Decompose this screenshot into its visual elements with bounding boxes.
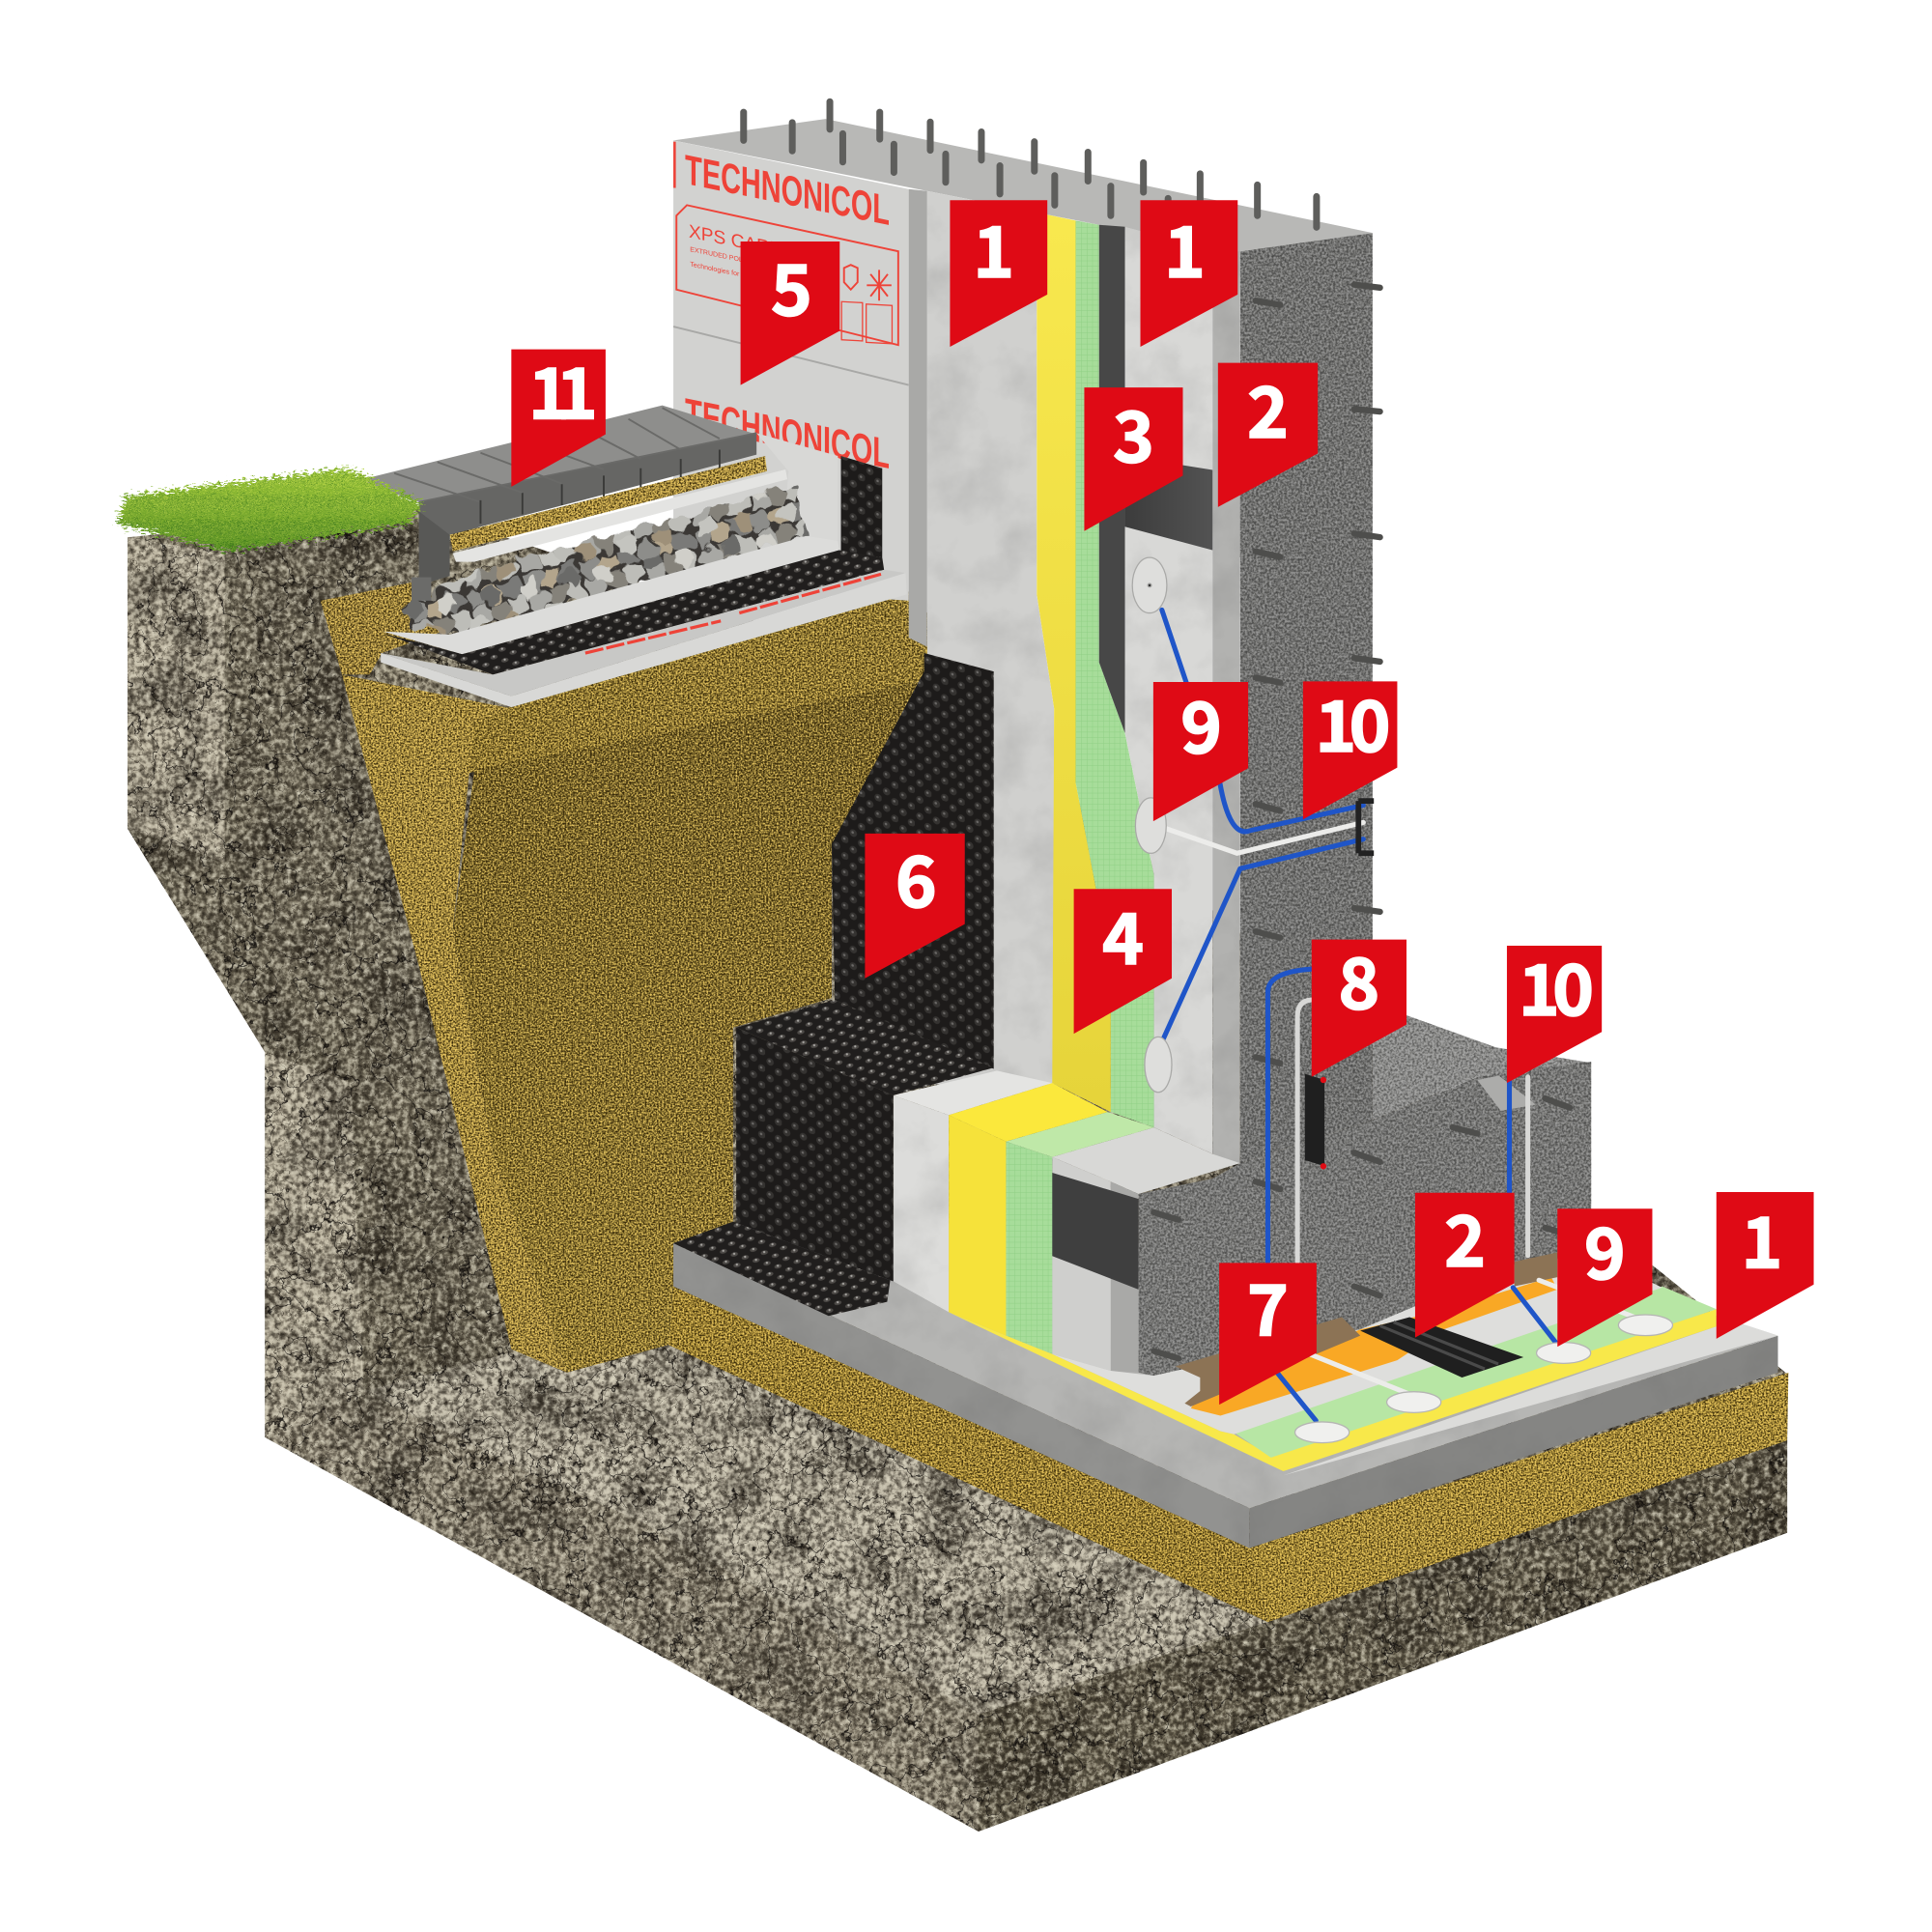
marker 9 floor [1557, 1198, 1652, 1347]
marker 8: 8 [1338, 928, 1379, 1030]
product label frame: XPS CARBON [689, 222, 810, 267]
curb and pipe [412, 511, 450, 601]
marker 6: 6 [895, 826, 937, 927]
product label frame: Technologies for protection [690, 261, 771, 285]
wall cut face [1240, 233, 1373, 1163]
dark sealing band [1099, 225, 1240, 733]
geotextile sheet under gravel [384, 536, 839, 654]
brand text: upper: TECHNONICOL [685, 146, 890, 235]
marker 10 wall: 10 [1315, 670, 1388, 772]
paving stones [357, 406, 756, 585]
marker 1 wall left: 1 [973, 196, 1014, 298]
XPS insulation board [673, 119, 1373, 647]
marker 11 [511, 338, 606, 487]
dimpled drainage membrane [673, 653, 994, 1316]
floor waterproofing layers [949, 1253, 1778, 1475]
concrete slab [673, 1208, 1778, 1548]
soil: excavated ground mass [128, 508, 1787, 1832]
brand text: lower: TECHNONICOL [685, 389, 890, 478]
marker 10 footing [1507, 934, 1602, 1083]
marker 1 floor [1717, 1186, 1814, 1339]
upper dimpled membrane [841, 456, 882, 557]
marker 4: 4 [1102, 883, 1144, 984]
marker 1 wall right: 1 [1164, 196, 1206, 298]
retaining wall behind gravel [756, 433, 838, 542]
tube bracket [1358, 801, 1374, 853]
marker 9 wall: 9 [1180, 671, 1222, 773]
marker 2 floor: 2 [1444, 1185, 1486, 1287]
marker 7 [1219, 1255, 1317, 1405]
marker 6 [865, 826, 965, 979]
marker 4 [1074, 883, 1172, 1034]
concrete wall left face [927, 191, 1054, 1084]
marker 1 wall right [1140, 196, 1237, 347]
footing [1139, 1003, 1591, 1376]
marker 2 wall [1218, 356, 1318, 507]
product label frame: EXTRUDED POLYSTYRENE [690, 245, 779, 271]
marker 2 floor [1415, 1185, 1515, 1338]
floor injection ports [1295, 1315, 1673, 1443]
wall injection ports [1132, 557, 1172, 1093]
marker 9 floor: 9 [1584, 1198, 1626, 1299]
marker 8 [1312, 928, 1406, 1077]
light concrete strip [1125, 227, 1212, 1154]
grass patch [117, 469, 422, 552]
waterstop strip on floor [1360, 1318, 1523, 1378]
marker 1 floor: 1 [1742, 1186, 1782, 1288]
marker 10 wall [1303, 670, 1397, 819]
drainage board [381, 551, 907, 707]
geotextile layer: green [1076, 220, 1154, 1127]
ledge layers [894, 1070, 1240, 1373]
marker 10 footing: 10 [1519, 934, 1591, 1036]
product label frame [676, 205, 898, 345]
marker 3: 3 [1113, 381, 1154, 482]
crushed stone [401, 484, 807, 635]
geotextile wrap [453, 469, 787, 562]
marker 5 [741, 235, 839, 385]
wall injection tubes [1160, 610, 1528, 1262]
injection tubes on floor [1277, 1280, 1637, 1421]
waterproofing membrane: yellow [1037, 213, 1111, 1112]
embedded waterstop [1305, 1074, 1326, 1169]
wall section edge [1212, 249, 1240, 1164]
marker 1 wall left [950, 196, 1047, 347]
marker 9 wall [1153, 671, 1248, 821]
top rebar stubs [744, 101, 1317, 227]
side rebar stubs [1154, 285, 1573, 1358]
marker 3 [1084, 381, 1182, 531]
sand backfill [321, 582, 1788, 1622]
sand bedding layer [450, 456, 767, 552]
marker 7: 7 [1247, 1255, 1289, 1356]
marker 5: 5 [771, 235, 812, 336]
marker 11: 11 [528, 338, 594, 440]
marker 2 wall: 2 [1247, 356, 1289, 458]
